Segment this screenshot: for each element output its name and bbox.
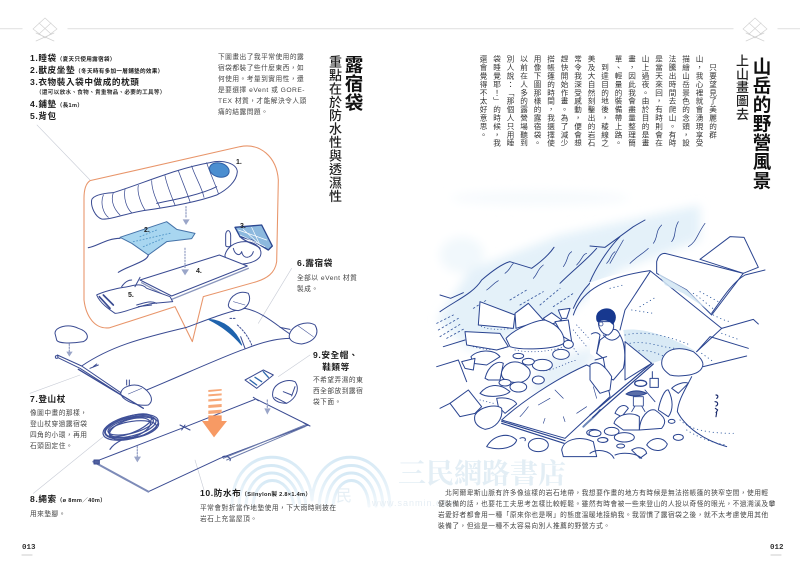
orange down arrow [202, 389, 227, 437]
pale blue washes [438, 191, 700, 395]
label 9 text: 不希望弄濕的東 [313, 377, 363, 384]
header rule with ornaments [0, 18, 800, 41]
label 7 heading: 7.登山杖 [30, 394, 66, 404]
right vertical body text: 袋睡覺耶！」的時候，我 [492, 55, 502, 147]
ground sheet [93, 397, 310, 492]
bivy bag [502, 365, 610, 443]
sit pad [88, 222, 195, 272]
numeral 3: 3. [240, 223, 246, 230]
right vertical body text: 山，我心裡就會湧現享受 [695, 55, 704, 147]
right caption paragraph: 便裝備的話，也要花工夫思考怎樣比較輕鬆。雖然有時會被一些來登山的人投以奇怪的眼光，不過溯溪及攀 [438, 501, 776, 508]
callout bubble [84, 146, 278, 342]
label 8 text: 用來墊腳。 [30, 511, 66, 518]
artist figure [590, 309, 652, 393]
label 7 text: 像圖中畫的那樣， [30, 410, 88, 417]
mountain camp scene [437, 191, 765, 458]
rope coil [100, 409, 161, 449]
label 8 heading: 8.繩索（ø 8mm／40m） [30, 494, 106, 504]
upper boulders [573, 237, 765, 380]
tarp edge [590, 363, 653, 417]
item 1: 1.睡袋（夏天只使用露宿袋） [30, 53, 116, 63]
left intro text: TEX 材質，才能解決令人頭 [218, 98, 307, 105]
label 10 text: 平常會對折當作地墊使用，下大雨時則披在 [200, 505, 337, 512]
foreground stones [487, 428, 618, 457]
page number underlines [22, 554, 781, 556]
backpack [97, 277, 173, 313]
left intro text: 何使用。考量到實用性，還 [218, 76, 304, 83]
camp stove and cups [614, 372, 688, 430]
label 6 text: 全部以 eVent 材質 [297, 275, 357, 282]
boulders [437, 302, 573, 429]
right vertical body text: 趕快開始作畫。為了減少 [560, 55, 569, 147]
trekking pole [55, 355, 143, 408]
bivy bag exploded diagram [30, 268, 317, 493]
bivy bag outline [82, 308, 292, 393]
label 7 text: 四角的小環，再用 [30, 432, 88, 439]
dashed arrows [66, 344, 271, 462]
label 7 [30, 394, 88, 450]
watermark url: www.sanmin.com [372, 498, 456, 508]
label 9 heading: 9.安全帽、 [313, 350, 358, 360]
left subtitle: 重點在於防水性與透濕性 [327, 55, 342, 203]
second arrow [181, 248, 189, 275]
right vertical body text: 用像下圖那樣的露宿袋。 [533, 55, 542, 147]
label 7 text: 石頭固定住。 [30, 443, 73, 450]
right vertical body text: 法騰出時間去爬山。有時 [668, 55, 677, 147]
sleeping bag [92, 161, 237, 219]
watermark small character: 民 [336, 488, 352, 505]
left intro text: 宿袋都裝了些什麼東西，如 [218, 65, 304, 72]
label 6 text [297, 274, 357, 293]
label 9 [313, 350, 363, 406]
left intro text: 是要選擇 eVent 或 GORE- [218, 87, 305, 94]
right vertical body text: 單、輕量的裝備帶上路。 [614, 55, 623, 147]
hatch shading [437, 288, 597, 423]
helmet [273, 381, 297, 403]
left half of scene [437, 247, 618, 457]
right subtitle: 上山畫圖去 [734, 54, 749, 121]
stippling [610, 285, 740, 445]
watermark logo arcs [232, 457, 390, 506]
sleeping mat [140, 255, 247, 296]
numeral labels in callout [128, 159, 246, 299]
label 9 text: 西全部放到露宿 [313, 388, 363, 395]
right half of scene [573, 220, 765, 458]
item 3 note: （還可以放水、食物、貴重物品、必要的工具等） [36, 90, 166, 96]
right vertical body text: 畫，因此我會盡量整理簡 [628, 55, 636, 147]
right vertical body text: 以前在人多的露營場聽到 [520, 55, 528, 147]
left title: 露宿袋 [343, 55, 364, 112]
right vertical body text: 還會覺得不太好意思。 [479, 55, 488, 139]
label 7 text: 登山杖穿過露宿袋 [30, 421, 88, 428]
item 5: 5.背包 [30, 111, 57, 121]
item 4: 4.鋪墊（長1m） [30, 99, 83, 109]
clothes pillow and bottle [225, 225, 272, 264]
right vertical body text: 描繪山岳景色的念頭，設 [682, 55, 690, 147]
label 10 text: 岩石上充當屋頂。 [200, 516, 258, 523]
label 6 heading: 6.露宿袋 [297, 258, 333, 268]
page number 012: 012 [770, 544, 784, 552]
artist signature [715, 395, 718, 417]
right caption paragraph: 北阿爾卑斯山脈有許多像這樣的岩石地帶，我想要作畫的地方有時候是無法搭帳篷的狹窄空間，使用輕 [445, 490, 769, 497]
mountain ridges [440, 247, 615, 312]
left intro text: 痛的結露問題。 [218, 109, 268, 116]
label 9 text: 袋下面。 [313, 399, 342, 406]
right caption paragraph: 裝備了，但這是一種不太容易向別人推薦的野營方式。 [438, 523, 610, 530]
label 10 heading: 10.防水布（Silnylon製 2.8×1.4m） [200, 488, 311, 498]
list leader line [37, 125, 90, 180]
right vertical body text [479, 55, 718, 147]
numeral 2: 2. [144, 227, 150, 234]
arrow between bag and mat [183, 207, 190, 225]
right vertical body text: 只要望見了美麗的群 [708, 63, 718, 139]
item list [30, 53, 166, 121]
right vertical body text: 美及大自然刻鑿出的岩石 [587, 55, 596, 147]
right title: 山岳的野營風景 [751, 57, 772, 190]
label 6 text: 製成。 [297, 286, 319, 293]
glove bag [245, 370, 273, 388]
label 10 [200, 488, 337, 523]
right caption paragraph: 岩愛好者都會用一種「原來你也是啊」的態度溫暖地接納我。我習慣了露宿袋之後，就不太考慮使用其他 [438, 512, 769, 519]
label 8 [30, 494, 106, 518]
right vertical body text: 搭帳篷的時間，我選擇使 [546, 55, 556, 147]
right caption paragraph [438, 489, 776, 530]
item 2: 2.獸皮坐墊（冬天時有多加一層鋪墊的效果） [30, 65, 164, 75]
right vertical body text: 別人說：「那個人只用睡 [506, 55, 515, 147]
rock washes [623, 273, 712, 363]
right vertical body text: 山上過夜。由於目的是畫 [641, 55, 650, 147]
right boulders [662, 319, 758, 447]
left intro text: 下圖畫出了我平常使用的露 [218, 54, 304, 61]
label 10 text [200, 504, 337, 523]
gear illustration: callout contents [84, 146, 278, 342]
numeral 1: 1. [236, 159, 242, 166]
item 3: 3.衣物裝入袋中做成的枕頭 [30, 77, 140, 87]
page number 013: 013 [22, 544, 36, 552]
mountain slope lines [590, 220, 705, 282]
left intro text [218, 53, 307, 116]
label 9 text [313, 376, 363, 406]
leader lines [30, 268, 310, 493]
right vertical body text: 到達目的地後，稜線之 [600, 63, 610, 147]
watermark text: 三民網路書店 [398, 459, 566, 490]
label 7 text [30, 409, 88, 450]
right vertical body text: 是當天來回，有時則會在 [654, 55, 664, 147]
right vertical body text: 常令我深受感動，便會想 [574, 55, 582, 147]
label 9 heading: 鞋類等 [322, 362, 350, 372]
numeral 5: 5. [128, 292, 134, 299]
label 9 heading [313, 350, 358, 372]
stones [55, 292, 317, 405]
label 6 [297, 258, 357, 293]
numeral 4: 4. [196, 268, 202, 275]
pebbles [589, 419, 683, 458]
